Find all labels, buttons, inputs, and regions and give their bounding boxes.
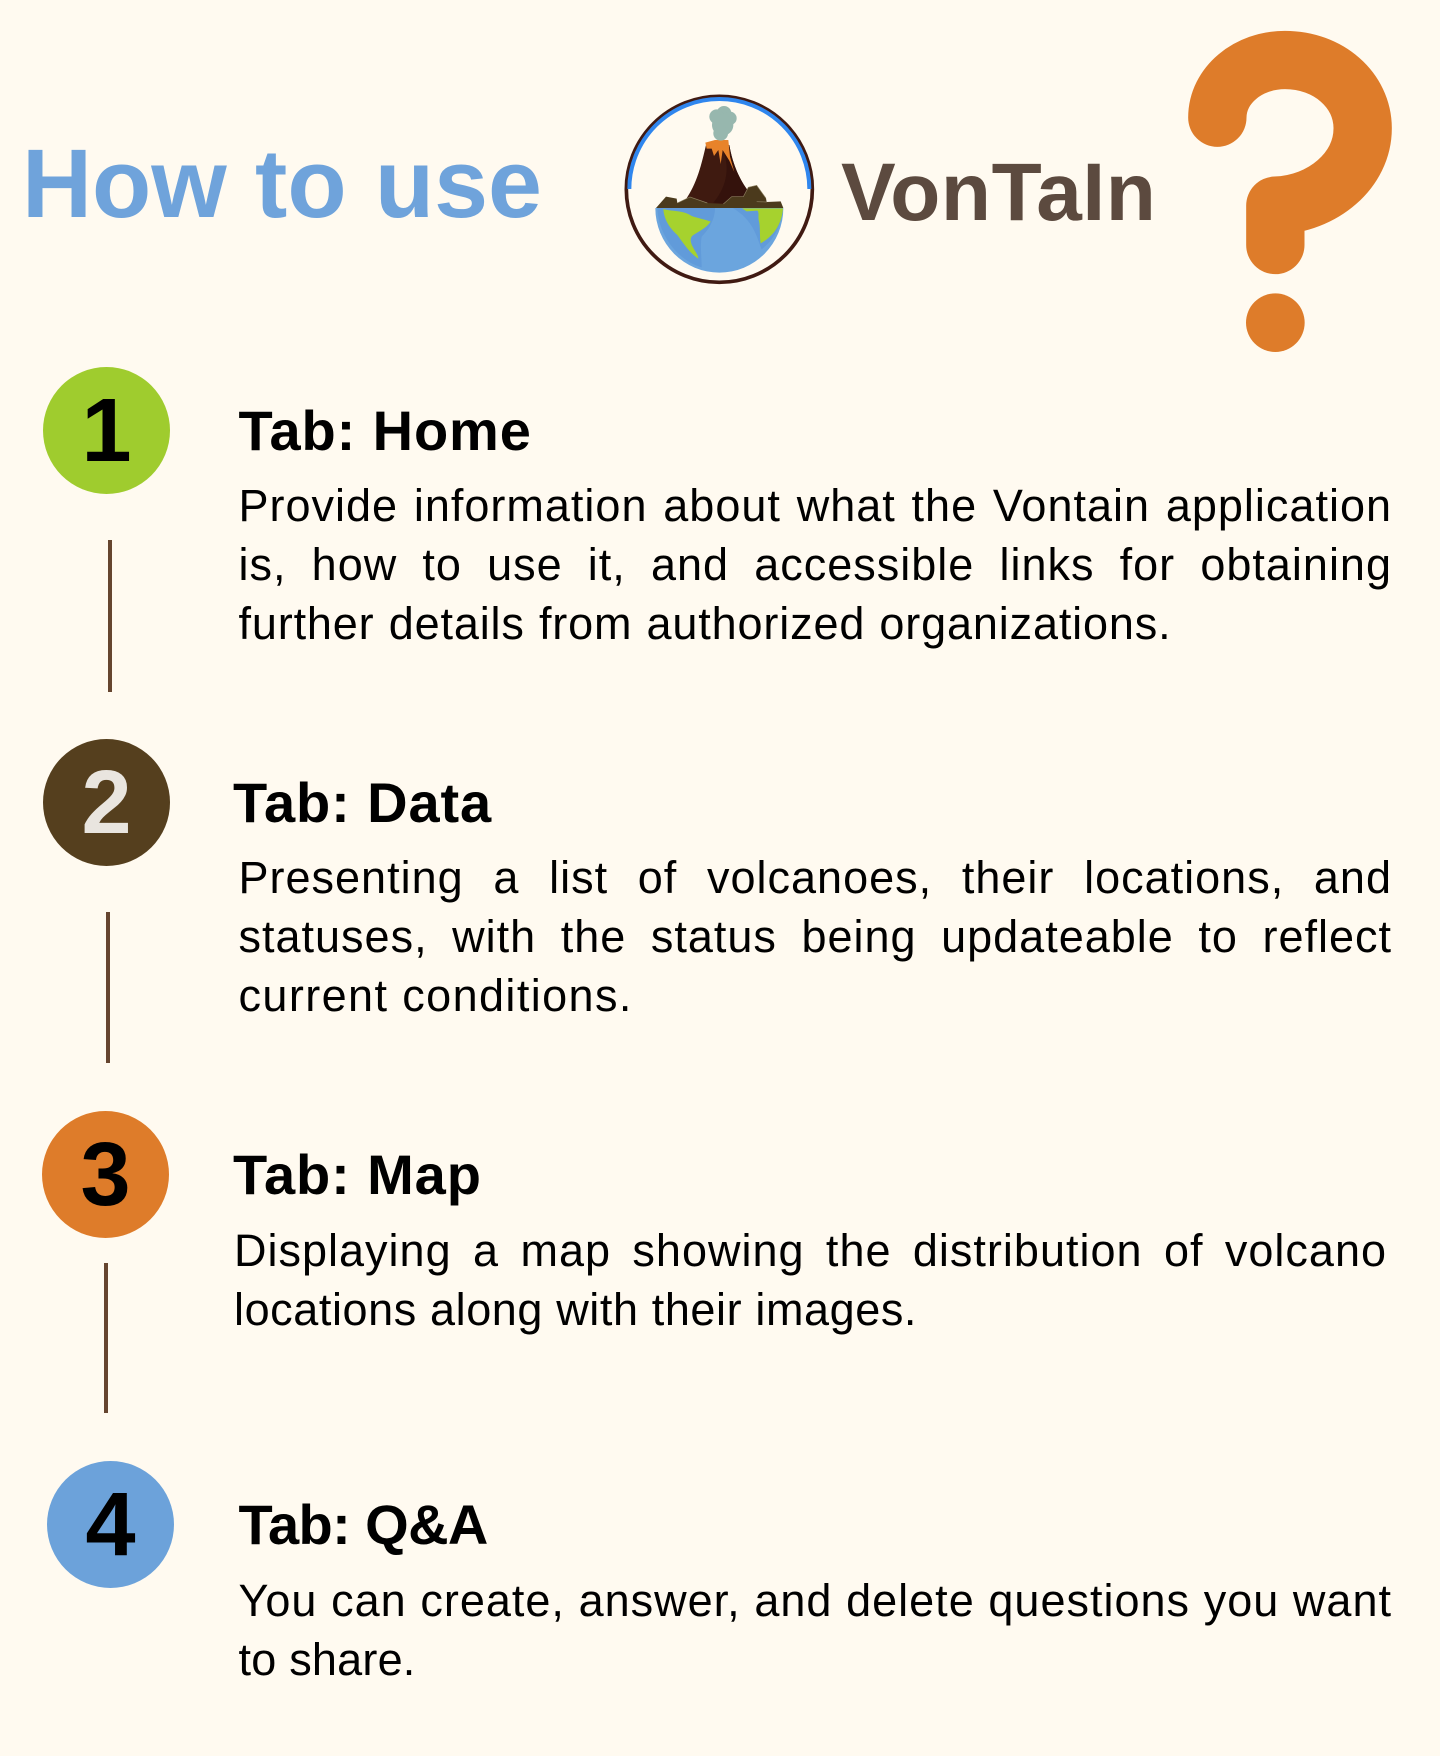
number badge 2: 2 bbox=[81, 752, 131, 852]
text: Data description: statuses, with the status being updateable to reflect bbox=[238, 911, 1392, 962]
text: Q&A description: to share. bbox=[238, 1634, 416, 1685]
number badge 3 bbox=[42, 1111, 169, 1238]
text: Map description: locations along with their images. bbox=[234, 1284, 917, 1335]
icon: question mark bbox=[1188, 30, 1392, 352]
step 3: Tab Map bbox=[42, 1111, 1387, 1413]
connector line 1 bbox=[108, 540, 112, 692]
text: Map description: Displaying a map showing the distribution of volcano bbox=[234, 1225, 1387, 1276]
text: Q&A description bbox=[238, 1575, 1392, 1685]
brand name: VonTaIn: VonTaIn bbox=[841, 147, 1156, 238]
connector line 3 bbox=[104, 1263, 108, 1413]
step 1: Tab Home bbox=[43, 367, 1392, 692]
step 2: Tab Data bbox=[43, 739, 1392, 1063]
text: Data description: current conditions. bbox=[238, 970, 633, 1021]
text: Home description: further details from authorized organizations. bbox=[238, 598, 1172, 649]
number badge 1 bbox=[43, 367, 170, 494]
title: How to use: How to use bbox=[22, 129, 542, 238]
number badge 2 bbox=[43, 739, 170, 866]
number badge 1: 1 bbox=[81, 380, 131, 480]
icon: VonTaIn volcano and globe logo bbox=[624, 94, 814, 284]
connector line 2 bbox=[106, 912, 110, 1063]
heading: Tab: Map: Tab: Map bbox=[233, 1143, 482, 1206]
text: Home description bbox=[238, 480, 1392, 649]
heading: Tab: Home: Tab: Home bbox=[238, 399, 532, 462]
number badge 3: 3 bbox=[80, 1124, 130, 1224]
text: Home description: Provide information about what the Vontain application bbox=[238, 480, 1392, 531]
text: Home description: is, how to use it, and accessible links for obtaining bbox=[238, 539, 1392, 590]
heading: Tab: Q&A: Tab: Q&A bbox=[238, 1493, 488, 1556]
text: Q&A description: You can create, answer, and delete questions you want bbox=[238, 1575, 1392, 1626]
text: Map description bbox=[234, 1225, 1387, 1335]
step 4: Tab Q&A bbox=[47, 1461, 1392, 1685]
text: Data description bbox=[238, 852, 1392, 1021]
text: Data description: Presenting a list of volcanoes, their locations, and bbox=[238, 852, 1392, 903]
number badge 4 bbox=[47, 1461, 174, 1588]
heading: Tab: Data: Tab: Data bbox=[233, 771, 492, 834]
number badge 4: 4 bbox=[85, 1474, 135, 1574]
